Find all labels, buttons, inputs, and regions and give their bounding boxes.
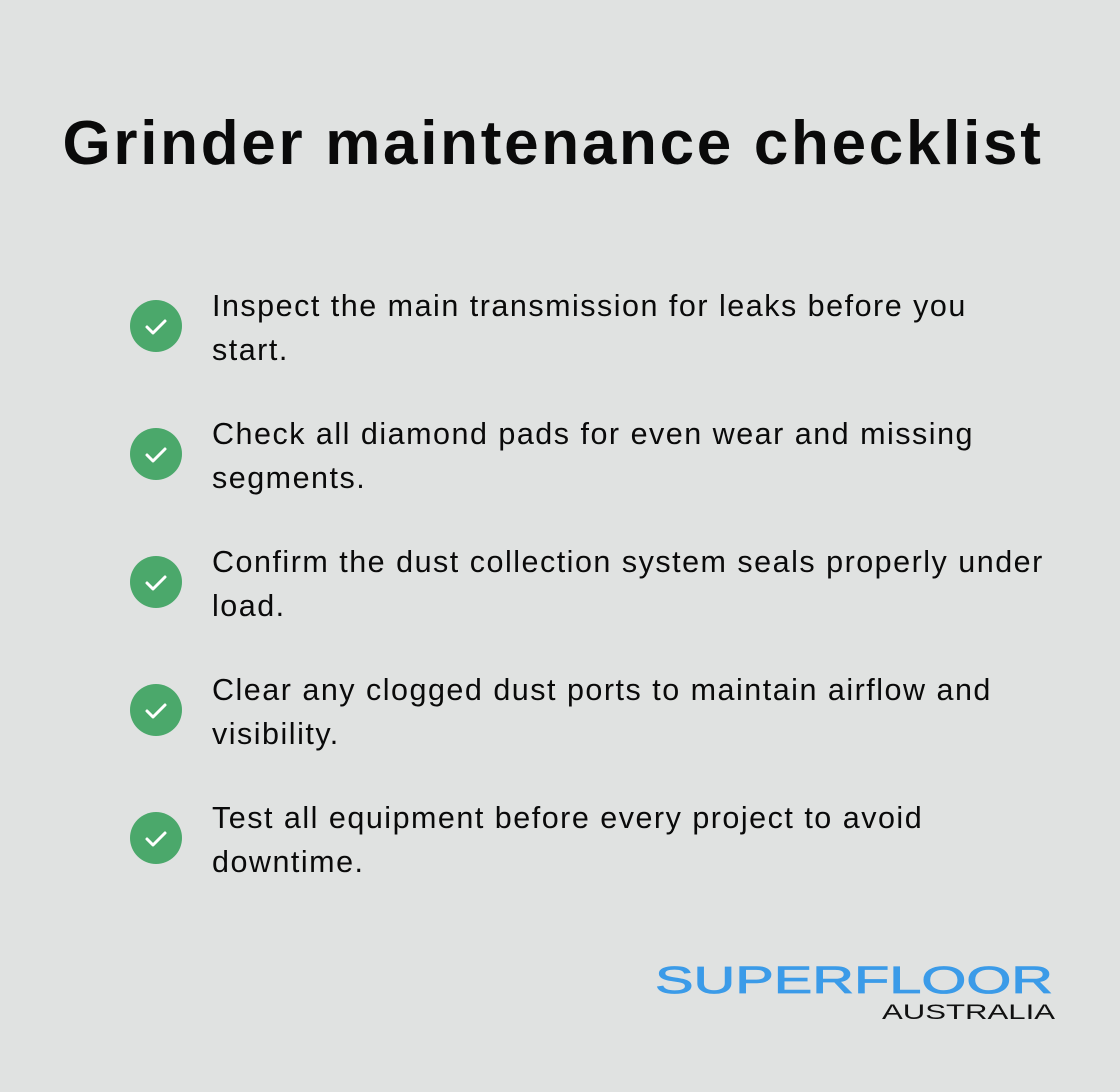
text: Clear any clogged dust ports to maintain airflow and — [212, 673, 992, 707]
text: downtime. — [212, 845, 365, 879]
icon: check — [130, 300, 182, 352]
icon: check — [130, 556, 182, 608]
text: start. — [212, 333, 289, 367]
text: Inspect the main transmission for leaks before you — [212, 289, 967, 323]
icon: check — [130, 812, 182, 864]
text: Test all equipment before every project to avoid — [212, 801, 923, 835]
text — [212, 801, 923, 879]
text — [212, 673, 992, 751]
item 4 — [130, 673, 992, 751]
text — [212, 289, 967, 367]
text — [212, 545, 1044, 623]
text — [212, 417, 974, 495]
item 5 — [130, 801, 923, 879]
text: segments. — [212, 461, 366, 495]
logo: SUPERFLOOR — [655, 960, 1053, 1002]
text: load. — [212, 589, 286, 623]
logo: AUSTRALIA — [882, 1001, 1055, 1024]
text: Confirm the dust collection system seals properly under — [212, 545, 1044, 579]
text: visibility. — [212, 717, 340, 751]
item 3 — [130, 545, 1044, 623]
item 2 — [130, 417, 974, 495]
icon: check — [130, 428, 182, 480]
item 1 — [130, 289, 967, 367]
icon: check — [130, 684, 182, 736]
title: Grinder maintenance checklist — [62, 109, 1044, 178]
text: Check all diamond pads for even wear and missing — [212, 417, 974, 451]
logo — [655, 960, 1055, 1024]
